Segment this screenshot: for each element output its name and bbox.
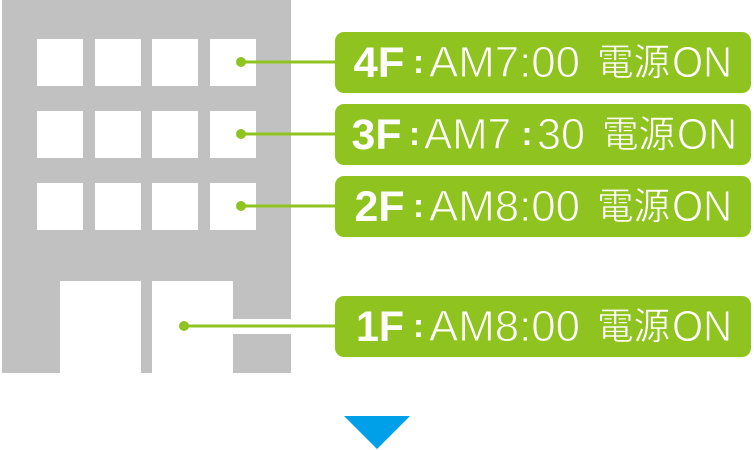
label: 2F: AM8:00 [429, 182, 580, 231]
label: 2F: 電源 [597, 186, 670, 227]
label: 3F: 3F [352, 111, 402, 159]
label: 3F [335, 104, 751, 165]
label: 1F [335, 296, 751, 357]
label: 1F: ON [672, 302, 732, 351]
label: 3F: 電源 [602, 114, 675, 155]
connector: 1F [179, 321, 341, 331]
label: 3F: : [409, 115, 420, 152]
label: 2F [335, 176, 751, 237]
arrow: down [344, 416, 410, 449]
connector: 3F [236, 129, 341, 139]
label: 1F: AM8:00 [429, 302, 580, 351]
label: 4F: 電源 [597, 42, 670, 83]
label: 1F: : [413, 307, 424, 344]
label: 2F: : [413, 187, 424, 224]
label: 3F: : [522, 115, 532, 152]
label: 3F: 30 [537, 110, 585, 159]
label: 2F: 2F [354, 183, 404, 231]
building [2, 0, 291, 373]
label: 1F: 1F [356, 303, 404, 351]
label: 4F: ON [672, 38, 732, 87]
label: 4F [335, 32, 751, 93]
label: 2F: ON [672, 182, 732, 231]
label: 4F: 4F [354, 39, 404, 87]
connector: 2F [236, 201, 341, 211]
label: 3F: ON [677, 110, 737, 159]
label: 3F: AM7 [424, 110, 511, 159]
connector: 4F [236, 57, 341, 67]
label: 1F: 電源 [597, 306, 670, 347]
label: 4F: : [413, 43, 424, 80]
label: 4F: AM7:00 [429, 38, 580, 87]
